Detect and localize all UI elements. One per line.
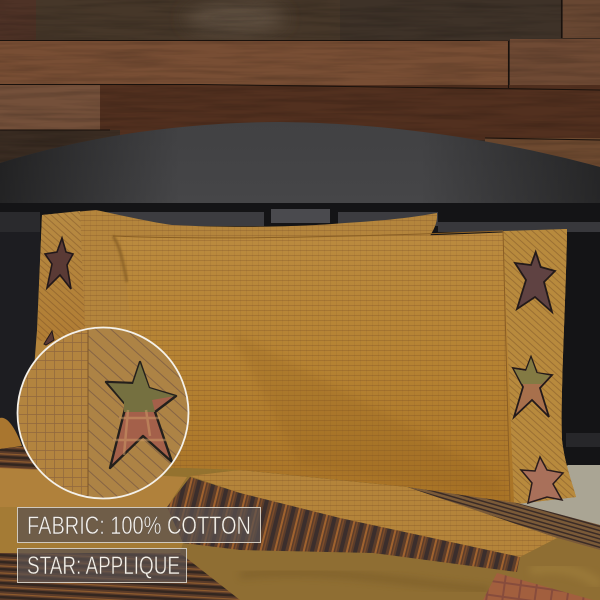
icon: enlarged star applique <box>106 362 176 468</box>
icon: partial star on back pillow <box>44 331 54 345</box>
dark striped band <box>167 477 520 572</box>
icon: star middle right <box>513 357 552 417</box>
label: star: STAR: APPLIQUE <box>27 552 180 580</box>
small tucked pillow corner <box>0 418 22 449</box>
front pillow <box>113 229 576 504</box>
striped binding wedge <box>407 487 600 550</box>
label: fabric <box>18 508 260 542</box>
plaid block <box>483 573 593 600</box>
callout: magnified star detail <box>15 325 190 501</box>
label: star <box>18 548 186 582</box>
icon: star top right <box>515 252 555 312</box>
label: fabric: FABRIC: 100% COTTON <box>27 512 251 540</box>
headboard <box>0 122 600 600</box>
lower tan block <box>180 538 600 600</box>
wood plank wall <box>0 0 600 167</box>
back pillow <box>30 210 437 420</box>
icon: star bottom right <box>521 457 563 503</box>
floor <box>515 465 600 528</box>
quilt <box>0 418 600 600</box>
gold band <box>190 470 557 557</box>
icon: star on back pillow <box>45 238 73 289</box>
